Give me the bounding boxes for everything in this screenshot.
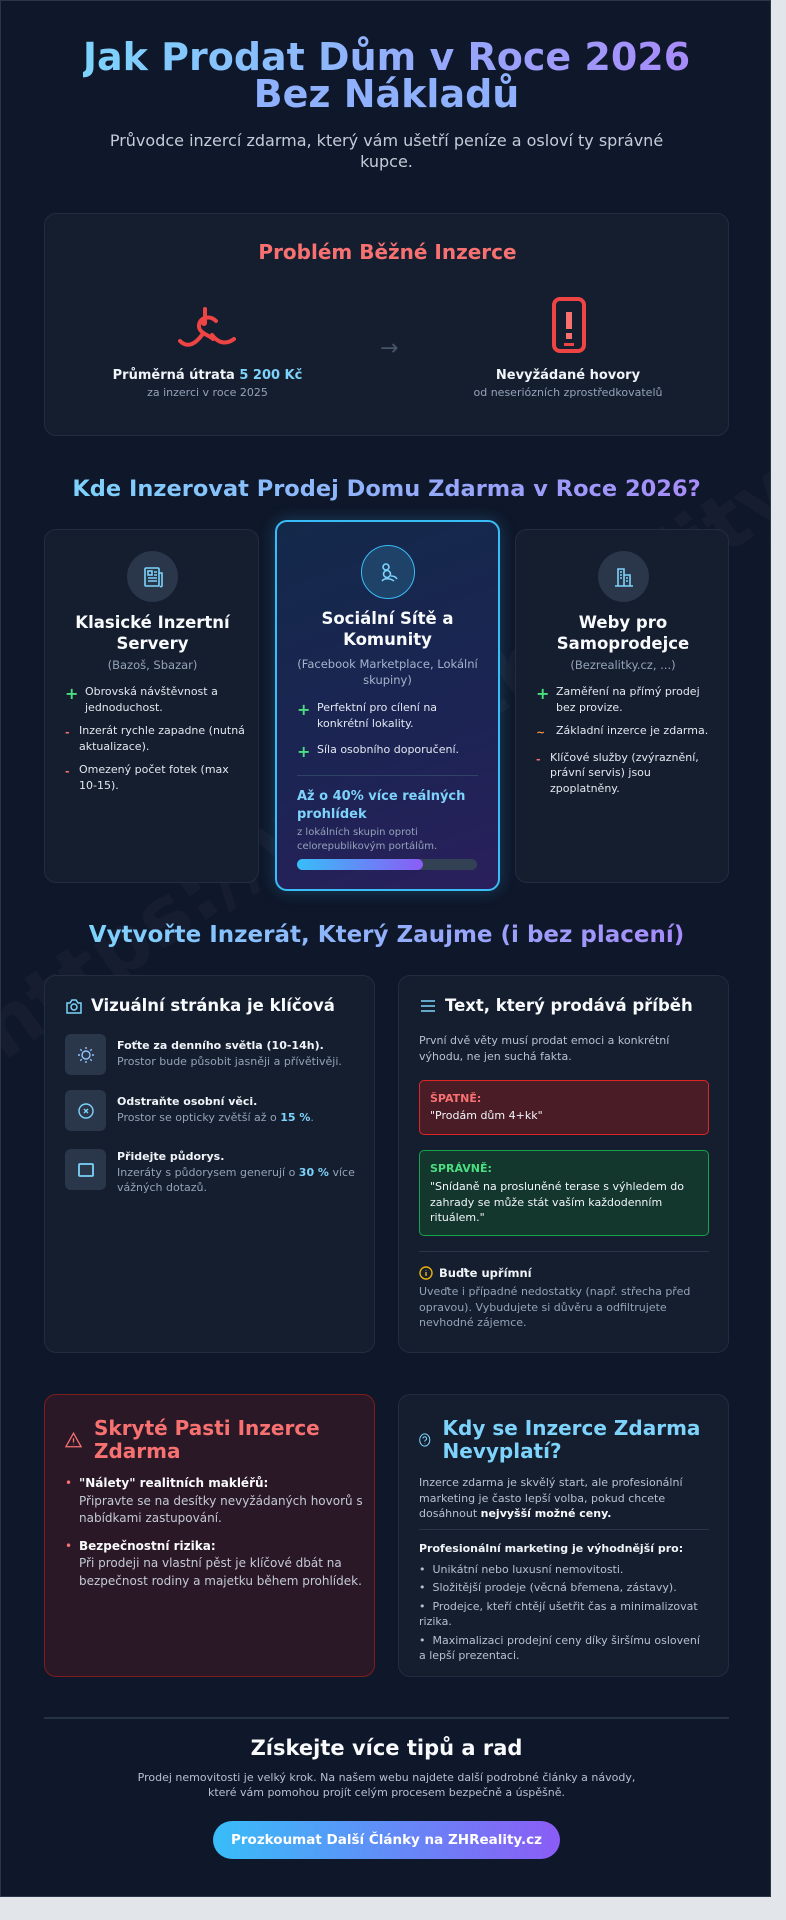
list: pros: Perfektní pro cílení na konkrétní lokality. (317, 701, 437, 730)
list: pro marketing: Profesionální marketing je výhodnější pro: (419, 1542, 683, 1555)
list: pros cons: - (65, 765, 70, 778)
list: pros cons: Omezený počet fotek (max 10-15). (79, 763, 229, 792)
panel: self-seller websites: (Bezrealitky.cz, ...) (570, 658, 676, 672)
heading: more tips: Získejte více tipů a rad (251, 1736, 522, 1760)
list: traps: • (65, 1538, 72, 1552)
list: pros cons: Obrovská návštěvnost a jednoduchost. (85, 685, 218, 714)
list: traps: Připravte se na desítky nevyžádaných hovorů s nabídkami zastupování. (79, 1494, 363, 1525)
list: pros (297, 700, 459, 761)
item: daylight: Foťte za denního světla (10-14h). (117, 1039, 324, 1052)
list: pros: Síla osobního doporučení. (317, 743, 459, 756)
panel: when free doesn't pay (398, 1394, 729, 1677)
icon: money loss (178, 307, 236, 347)
panel: social networks (275, 520, 500, 891)
heading: Kdy se Inzerce Zdarma Nevyplatí? (443, 1416, 700, 1463)
list: ~ (536, 726, 545, 739)
panel: text that sells: První dvě věty musí prodat emoci a konkrétní výhodu, ne jen suchá fakta. (419, 1034, 669, 1062)
stat: 40%: Až o 40% více reálných prohlídek (297, 789, 465, 822)
title (83, 35, 690, 116)
list (536, 684, 708, 794)
callout: wrong: ŠPATNĚ: (430, 1092, 481, 1105)
card title: Klasické Inzertní (75, 613, 230, 632)
panel: social networks: z lokálních skupin oproti celorepublikovým portálům. (297, 827, 437, 852)
text: calls: Nevyžádané hovory (496, 368, 640, 383)
list: - (536, 752, 541, 766)
card title (321, 609, 454, 649)
panel: problem (44, 213, 729, 436)
list: pro marketing: • Složitější prodeje (věcná břemena, zástavy). (419, 1581, 677, 1594)
callout: correct: SPRÁVNĚ: (430, 1162, 492, 1175)
heading: where to advertise: Kde Inzerovat Prodej Domu Zdarma v Roce 2026? (72, 476, 701, 502)
list: traps: Bezpečnostní rizika: (79, 1538, 216, 1552)
card title: Weby pro (579, 613, 667, 632)
callout: correct: "Snídaně na prosluněné terase s výhledem do zahrady se může stát vaším každodenním rituálem." (430, 1180, 684, 1224)
item: personal items: Prostor se opticky zvětší až o 15 %. (117, 1110, 314, 1124)
panel: self-seller websites (515, 529, 729, 883)
panel: problem: od neseriózních zprostředkovatelů (474, 386, 662, 399)
list: + (536, 684, 549, 703)
card title: Servery (116, 634, 189, 653)
list: Klíčové služby (zvýraznění, právní servis) jsou zpoplatněny. (550, 750, 699, 794)
heading: visual: Vizuální stránka je klíčová (91, 996, 335, 1015)
tip: be honest: Buďte upřímní (439, 1266, 532, 1280)
icon: phone alert (552, 297, 586, 353)
item: floor plan: Inzeráty s půdorysem generují o 30 % více vážných dotazů. (117, 1166, 355, 1194)
card title: Samoprodejce (557, 634, 689, 653)
panel: visual (44, 975, 375, 1353)
item: personal items: Odstraňte osobní věci. (117, 1095, 257, 1108)
list: pro marketing: • Unikátní nebo luxusní nemovitosti. (419, 1562, 623, 1576)
item: daylight: Prostor bude působit jasněji a přívětivěji. (117, 1054, 342, 1068)
button: cta: Prozkoumat Další Články na ZHReality.cz (231, 1832, 542, 1848)
subtitle: Průvodce inzercí zdarma, který vám ušetří peníze a osloví ty správné kupce. (110, 131, 663, 171)
list: pros cons: + (65, 684, 78, 703)
callout: correct (419, 1150, 709, 1236)
list: Zaměření na přímý prodej bez provize. (556, 685, 700, 714)
item: personal items (65, 1090, 314, 1131)
list: pro marketing: • Maximalizaci prodejní ceny díky širšímu oslovení a lepší prezentaci. (419, 1634, 700, 1662)
heading: create ad: Vytvořte Inzerát, Který Zaujme (i bez placení) (89, 922, 684, 948)
list: traps: "Nálety" realitních makléřů: (79, 1476, 268, 1490)
list: traps: • (65, 1476, 72, 1490)
callout: wrong (419, 1080, 709, 1135)
item: daylight (65, 1034, 342, 1075)
list: pro marketing: • Prodejce, kteří chtějí ušetřit čas a minimalizovat rizika. (419, 1600, 698, 1628)
card title: Sociální Sítě a (321, 609, 454, 628)
text: cta: Prodej nemovitosti je velký krok. Na našem webu najdete další podrobné články a návody, které vám pomohou projít celým procesem bezpečně a úspěšně. (138, 1771, 635, 1799)
list: pros: + (297, 700, 310, 719)
card title (557, 613, 689, 653)
heading: traps: Skryté Pasti Inzerce Zdarma (94, 1416, 320, 1463)
callout: wrong: "Prodám dům 4+kk" (430, 1109, 543, 1122)
heading: problem: Problém Běžné Inzerce (258, 240, 517, 264)
list: pros: + (297, 742, 310, 761)
panel: social networks: (Facebook Marketplace, Lokální skupiny) (297, 657, 478, 687)
card title: Komunity (343, 630, 432, 649)
title: Bez Nákladů (254, 72, 519, 116)
icon: buildings (598, 551, 649, 602)
panel: classic servers: (Bazoš, Sbazar) (108, 658, 197, 672)
icon: community (361, 545, 415, 599)
panel: text that sells (398, 975, 729, 1353)
icon: newspaper (127, 551, 178, 602)
list: traps: Při prodeji na vlastní pěst je klíčové dbát na bezpečnost rodiny a majetku během prohlídek. (79, 1556, 362, 1588)
list: pro marketing (419, 1542, 700, 1662)
item: floor plan: Přidejte půdorys. (117, 1150, 224, 1163)
panel: when free doesn't pay: Inzerce zdarma je skvělý start, ale profesionální marketing je často lepší volba, pokud chcete dosáhnout nejvyšší možné ceny. (419, 1476, 683, 1520)
list: pros cons (65, 684, 245, 792)
heading: text: Text, který prodává příběh (445, 996, 693, 1015)
tip: be honest: Uveďte i případné nedostatky (např. střecha před opravou). Vybudujete si důvěru a odfiltrujete nevhodné zájemce. (419, 1285, 690, 1329)
list: pros cons: - (65, 726, 70, 739)
button: cta (213, 1821, 560, 1859)
text: spending: Průměrná útrata 5 200 Kč (113, 368, 302, 383)
panel: problem: za inzerci v roce 2025 (147, 386, 268, 399)
tip: be honest (419, 1266, 690, 1329)
panel: classic servers (44, 529, 259, 883)
title: Jak Prodat Dům v Roce 2026 (83, 35, 690, 79)
item: floor plan (65, 1149, 355, 1194)
card title (75, 613, 230, 653)
panel: hidden traps (44, 1394, 375, 1677)
list: pros cons: Inzerát rychle zapadne (nutná aktualizace). (79, 724, 245, 752)
progress bar (297, 859, 477, 870)
list: Základní inzerce je zdarma. (556, 724, 708, 737)
list: traps (65, 1476, 363, 1588)
arrow: → (380, 336, 398, 361)
